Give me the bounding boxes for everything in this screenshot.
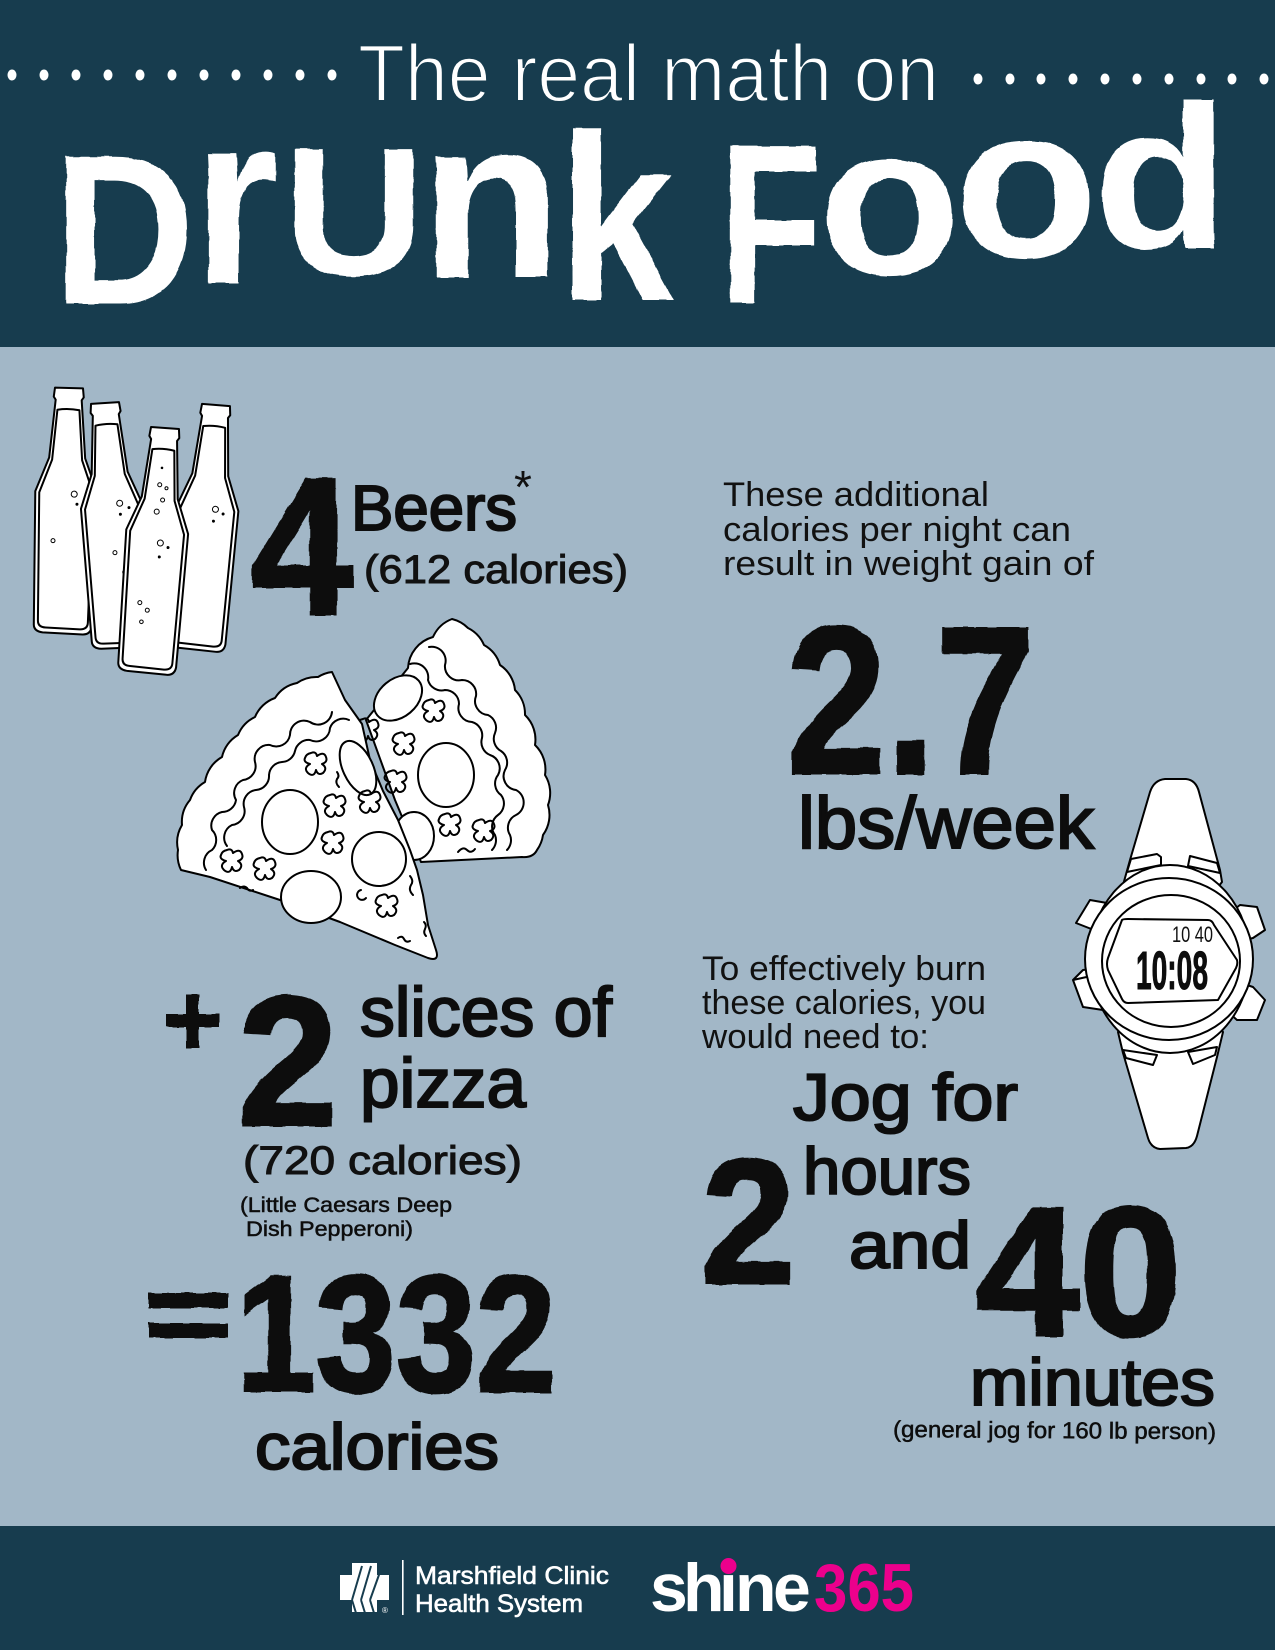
pizza note: Dish Pepperoni) — [246, 1218, 413, 1241]
header band — [0, 0, 1275, 352]
label: lbs per week: lbs/week — [798, 783, 1095, 864]
label: calories: calories — [255, 1410, 499, 1483]
label: hours: hours — [803, 1134, 971, 1208]
bottle middle left — [74, 401, 152, 651]
total calories — [148, 1242, 556, 1483]
weight gain stat — [787, 583, 1095, 864]
bottle front — [116, 426, 196, 676]
burn intro text: To effectively burn — [702, 950, 986, 988]
logo divider — [402, 1560, 404, 1615]
heading: drunk food: o — [818, 80, 961, 320]
logo text: marshfield clinic health system — [415, 1562, 609, 1618]
asterisk: * — [514, 461, 532, 513]
weight gain intro text: calories per night can — [723, 511, 1071, 549]
label: beers: Beers — [351, 472, 517, 544]
jog duration — [701, 1060, 1216, 1444]
label: slices of pizza — [360, 973, 613, 1122]
label: slices of pizza: pizza — [360, 1044, 526, 1122]
left dotted rule — [8, 70, 336, 80]
pizza calories: (720 calories) — [243, 1139, 522, 1183]
label: jog for: Jog for — [793, 1060, 1018, 1134]
logo: shine365: shine — [650, 1550, 811, 1626]
jog note: (general jog for 160 lb person) — [893, 1416, 1216, 1444]
numeral 4: 4 — [251, 437, 353, 656]
weight gain intro text: result in weight gain of — [723, 545, 1095, 583]
heading: drunk food: r — [193, 63, 279, 336]
heading: drunk food: k — [558, 86, 675, 351]
watch lugs — [1123, 854, 1220, 1065]
heading: drunk food: d — [1093, 63, 1229, 292]
watch buttons — [1073, 900, 1265, 1020]
logo: shine365 — [650, 1550, 914, 1626]
beer calories: (612 calories) — [364, 548, 628, 592]
label: minutes: minutes — [970, 1345, 1215, 1419]
burn intro text: these calories, you — [702, 984, 986, 1022]
numeral 2: 2 — [238, 959, 338, 1165]
watch time large: 10:08 — [1136, 941, 1208, 1001]
logo text: marshfield clinic health system: Marshfield Clinic — [415, 1562, 609, 1590]
bottle back right — [165, 402, 247, 653]
label: slices of pizza: slices of — [360, 973, 613, 1051]
front pizza slice — [177, 672, 437, 959]
heading: drunk food: D — [53, 110, 195, 350]
burn intro text — [701, 950, 986, 1056]
numeral 40: 40 — [976, 1168, 1182, 1374]
weight gain intro text — [723, 476, 1095, 583]
watch collar — [1090, 865, 1250, 1053]
logo: marshfield cross — [340, 1563, 389, 1615]
total number: 1332 — [236, 1242, 556, 1427]
burn intro text: would need to: — [701, 1018, 929, 1056]
watch straps — [1118, 779, 1223, 1149]
numeral 2: 2 — [701, 1122, 795, 1321]
pizza note: (Little Caesars Deep — [240, 1194, 452, 1217]
logo: marshfield cross: ® — [382, 1606, 388, 1615]
watch display — [1107, 919, 1237, 1003]
heading: drunk food: F — [719, 96, 822, 352]
watch time small: 10 40 — [1172, 922, 1213, 947]
heading: the real math on: The real math on — [358, 29, 939, 119]
icon: pizza slices — [177, 619, 550, 959]
label: and: and — [849, 1208, 971, 1282]
pizza note — [240, 1194, 452, 1241]
heading: drunk food: o — [954, 61, 1098, 303]
bottle back left — [32, 387, 100, 635]
logo text: marshfield clinic health system: Health System — [415, 1590, 583, 1618]
footer band — [0, 1526, 1275, 1650]
heading: drunk food — [53, 61, 1229, 352]
icon: digital watch — [1073, 779, 1265, 1149]
right dotted rule — [974, 74, 1268, 84]
pizza count — [166, 959, 613, 1241]
back pizza slice — [357, 619, 550, 862]
heading: drunk food: U — [283, 110, 425, 314]
icon: four beer bottles — [32, 387, 247, 676]
plus sign — [166, 994, 219, 1049]
equals sign — [148, 1293, 228, 1338]
heading: drunk food: n — [420, 72, 562, 325]
watch case — [1085, 878, 1253, 1040]
beers count — [251, 437, 628, 656]
weight gain intro text: These additional — [723, 476, 989, 514]
logo: shine365: 365 — [814, 1550, 914, 1626]
number 2.7: 2.7 — [787, 583, 1035, 818]
